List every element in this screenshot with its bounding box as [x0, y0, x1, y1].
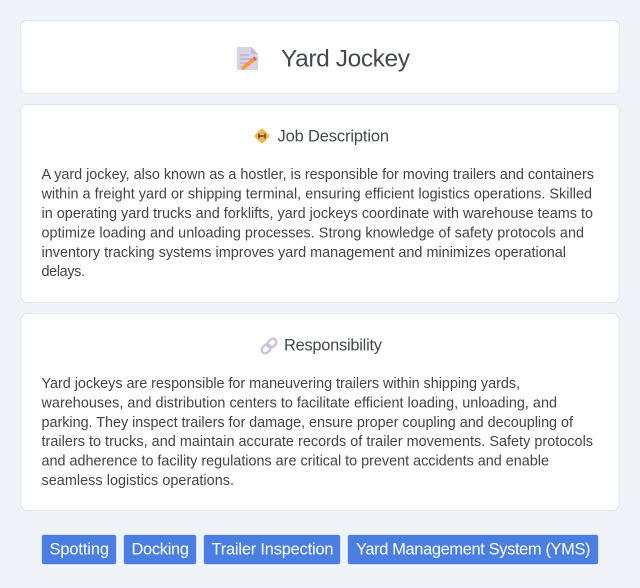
- text block: job description: within a freight yard or shipping terminal, ensuring efficient logistics operations. Skilled: [40, 186, 592, 202]
- text block: job description: optimize loading and unloading processes. Strong knowledge of safety protocols and: [42, 226, 584, 242]
- text block: job description: delays.: [42, 264, 85, 280]
- tag: Trailer Inspection: Trailer Inspection: [212, 540, 334, 558]
- heading: job description: Job Description: [278, 128, 389, 146]
- tag: Docking: Docking: [132, 540, 189, 558]
- tag: Yard Management System (YMS): Yard Management System (YMS): [356, 540, 590, 558]
- panel: title header: [20, 20, 620, 94]
- panel: responsibility: [20, 314, 620, 510]
- tag: Docking: [124, 534, 196, 564]
- tag: Spotting: Spotting: [50, 540, 109, 558]
- text block: responsibility: and adherence to facility regulations are critical to prevent accidents and enable: [42, 454, 549, 470]
- text block: responsibility: seamless logistics operations.: [42, 473, 234, 489]
- icon: chain link: [260, 337, 278, 355]
- text block: responsibility: Yard jockeys are responsible for maneuvering trailers within shipping yards,: [42, 376, 520, 392]
- tag: Yard Management System (YMS): [348, 534, 598, 564]
- panel: job description: [20, 104, 620, 302]
- text block: responsibility: [40, 376, 593, 489]
- text block: job description: in operating yard trucks and forklifts, yard jockeys coordinate with warehouse teams to: [42, 206, 593, 222]
- tag: Trailer Inspection: [204, 534, 340, 564]
- tag: Spotting: [42, 534, 116, 564]
- text block: job description: [40, 167, 594, 280]
- text block: job description: A yard jockey, also known as a hostler, is responsible for moving trailers and containers: [42, 167, 594, 183]
- text block: responsibility: trailers to trucks, and maintain accurate records of trailer movements. Safety protocols: [42, 434, 593, 450]
- title: Yard Jockey: [281, 46, 411, 72]
- text block: responsibility: parking. They inspect trailers for damage, ensure proper coupling and decoupling of: [42, 415, 574, 431]
- text block: responsibility: warehouses, and distribution centers to facilitate efficient loading, unloading, and: [40, 396, 557, 412]
- icon: road sign diamond: [254, 128, 270, 144]
- heading: responsibility: Responsibility: [284, 336, 383, 354]
- text block: job description: inventory tracking systems improves yard management and minimizes operational: [42, 245, 566, 261]
- icon: document with pencil: [237, 47, 258, 70]
